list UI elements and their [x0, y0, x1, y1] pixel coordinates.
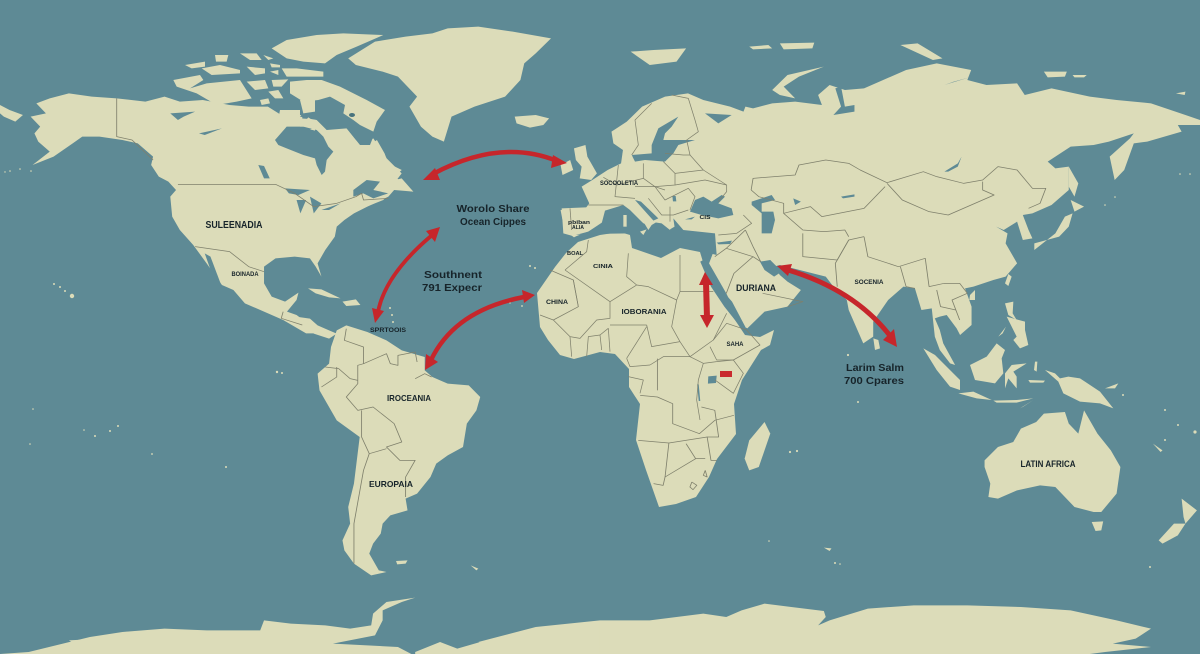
- country labels: SOCOOLETIA: [600, 181, 639, 187]
- callout: Southnent: [422, 270, 483, 294]
- country labels: SULEENADIA: [206, 220, 262, 231]
- arrow: Red Sea vertical route: [699, 272, 714, 328]
- seas: Hudson Bay, Hudson Strait and Gulf of St Lawrence: [275, 97, 388, 198]
- callout: Southnent: 791 Expecr: [422, 283, 482, 294]
- seas and lakes: Asia: [700, 77, 969, 328]
- lake: dark spot in Baffin: [349, 113, 355, 117]
- islands: Southeast Asia: [873, 274, 1118, 408]
- marker: red rectangle in East Africa: [720, 371, 732, 377]
- landmasses: North America and Greenland: [0, 27, 597, 333]
- Italy, Sicily, Sardinia and Britain detail: [622, 153, 660, 235]
- country labels: BOAL: [567, 251, 584, 257]
- scattered small islands: [4, 168, 1197, 568]
- arrow: Arabian Sea route: [777, 264, 897, 347]
- landmass: Africa: [537, 232, 774, 507]
- islands: Canadian Arctic, Baffin, Newfoundland: [173, 33, 413, 207]
- country borders: South America: [321, 329, 432, 564]
- country labels: SPRTOOIS: [370, 327, 407, 334]
- callout: Larim Salm: 700 Cpares: [844, 376, 904, 387]
- country labels: [206, 181, 1076, 489]
- landmass: northern Canada filler: [273, 110, 402, 190]
- arrow: South America to West Africa route: [425, 290, 535, 370]
- landmass: southern Europe filler: [562, 200, 752, 237]
- callout: Worolo Share: Worolo Share: [456, 204, 530, 215]
- country labels: DURIANA: [736, 283, 776, 294]
- callout: Worolo Share: Ocean Cippes: [460, 217, 526, 228]
- country labels: IROCEANIA: [387, 393, 431, 403]
- country borders: Asia: [715, 160, 1046, 320]
- arrow: Atlantic route from North to South America: [372, 227, 440, 323]
- country labels: EUROPAIA: [369, 479, 413, 489]
- country borders: southern Africa: [638, 359, 734, 490]
- country labels: CIS: [700, 215, 711, 221]
- country labels: CINIA: [593, 264, 613, 270]
- seas and lakes: Europe: [576, 113, 775, 255]
- seas and lakes: North America: [170, 112, 341, 285]
- country labels: pbiban: [568, 220, 590, 226]
- country labels: SAHA: [726, 341, 744, 348]
- callout: Larim Salm: [844, 363, 904, 387]
- landmass: Eurasia and northern islands: [561, 43, 1200, 365]
- country borders: North America: [117, 98, 388, 325]
- arrow: North Atlantic double-headed route: [423, 152, 567, 180]
- islands: Australia, New Zealand, Madagascar, Antarctica east: [600, 410, 1197, 654]
- country borders: Europe: [570, 95, 752, 235]
- country labels: BOINADA: [232, 272, 259, 278]
- country labels: SOCENIA: [854, 279, 884, 286]
- country labels: ALIA: [572, 225, 584, 231]
- landmass: South America and Antarctica west: [0, 317, 600, 654]
- callout: Larim Salm: Larim Salm: [846, 363, 904, 374]
- callout: Worolo Share: [456, 204, 530, 228]
- country labels: LATIN AFRICA: [1020, 459, 1076, 469]
- lake: Victoria and African rift lakes: [697, 376, 717, 401]
- country labels: IOBORANIA: [622, 307, 667, 316]
- callout: Southnent: Southnent: [424, 270, 483, 281]
- country labels: CHINA: [546, 299, 568, 306]
- country borders: northern and central Africa: [540, 240, 760, 420]
